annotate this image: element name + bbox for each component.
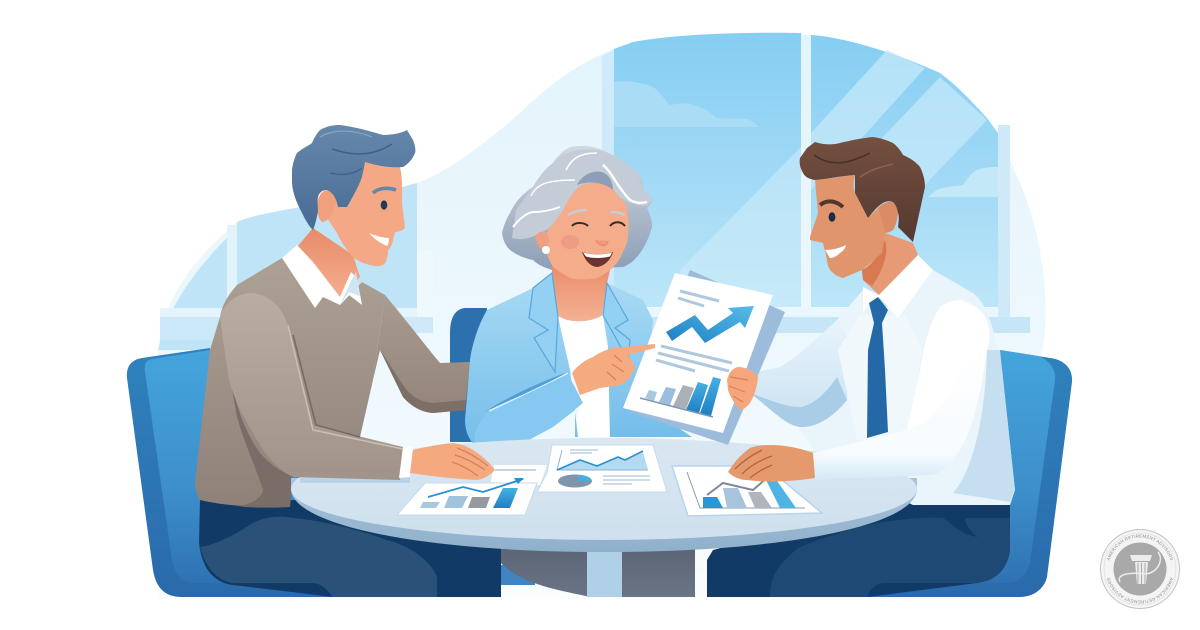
blouse (558, 315, 610, 437)
brows (568, 210, 625, 215)
document: right (672, 466, 822, 516)
window: left panes (158, 183, 433, 352)
arm: right man forearm (728, 350, 987, 481)
cuff (399, 447, 413, 478)
logo: American Retirement Advisors seal: AMERICAN RETIREMENT ADVISORS (1107, 534, 1173, 561)
jacket left (465, 273, 578, 452)
nose (596, 240, 608, 245)
document: behind (490, 465, 547, 485)
cloud right (928, 167, 998, 197)
table stem (587, 540, 622, 597)
hair back (502, 146, 653, 270)
window: right panes with sky (602, 33, 1030, 333)
chair: right (867, 350, 1072, 597)
hand (410, 443, 495, 480)
right sleeve upper (905, 300, 990, 475)
mouth (582, 252, 613, 267)
person: left man (195, 125, 470, 508)
face (810, 175, 885, 278)
far arm (750, 320, 850, 427)
earring (542, 246, 550, 254)
trousers: right man (707, 500, 1010, 597)
cheek (561, 235, 579, 249)
hand: woman's pointing hand (572, 344, 655, 395)
document: center (537, 445, 667, 492)
smile (825, 245, 846, 258)
ear (534, 230, 549, 254)
report trend arrow (666, 306, 754, 343)
eye (829, 212, 835, 222)
hand (728, 445, 815, 481)
person: center woman (465, 146, 692, 452)
shirt side shadow (953, 350, 1015, 502)
neck (297, 228, 360, 305)
sweater shadow (227, 360, 293, 508)
hair (292, 125, 415, 230)
hair front (512, 149, 653, 239)
ear (878, 202, 898, 233)
person: right man (750, 137, 1015, 505)
eye and brow (381, 200, 387, 210)
hand: right man holding report (727, 367, 758, 410)
lapels (529, 273, 558, 372)
document: held report (623, 270, 785, 445)
collar (282, 245, 362, 308)
background: pale blue room shape (158, 33, 1046, 598)
chair: center back (450, 308, 487, 442)
trousers: center (498, 540, 695, 597)
document: left (397, 478, 537, 515)
trousers: left man (199, 500, 501, 597)
logo: American Retirement Advisors seal: AMERICAN RETIREMENT ADVISORS (1107, 577, 1173, 604)
cloud left (614, 81, 758, 127)
face (325, 162, 405, 266)
neck (552, 262, 612, 322)
table (291, 438, 917, 552)
table documents (397, 445, 822, 516)
sky reflections (811, 50, 925, 190)
hair (800, 137, 925, 242)
face (543, 183, 628, 280)
ear (317, 190, 338, 222)
neck (862, 233, 918, 295)
collar (863, 255, 933, 318)
sweater torso (195, 258, 385, 507)
sleeve (474, 374, 583, 450)
inner shirt (323, 272, 360, 305)
sweater upper arm (373, 295, 470, 413)
sleeve fold (485, 372, 568, 412)
smile (369, 233, 389, 246)
logo: American Retirement Advisors seal (1100, 529, 1180, 609)
brow (820, 201, 843, 207)
arm: left man forearm (220, 293, 495, 480)
torso front (838, 315, 922, 440)
report text lines (656, 291, 732, 371)
tie (867, 297, 888, 438)
shirt torso (780, 270, 1015, 505)
chair: left (127, 348, 333, 597)
eyes (572, 222, 625, 226)
jacket right (603, 283, 692, 437)
report bar chart (640, 377, 721, 417)
chair: small base detail (495, 565, 535, 585)
